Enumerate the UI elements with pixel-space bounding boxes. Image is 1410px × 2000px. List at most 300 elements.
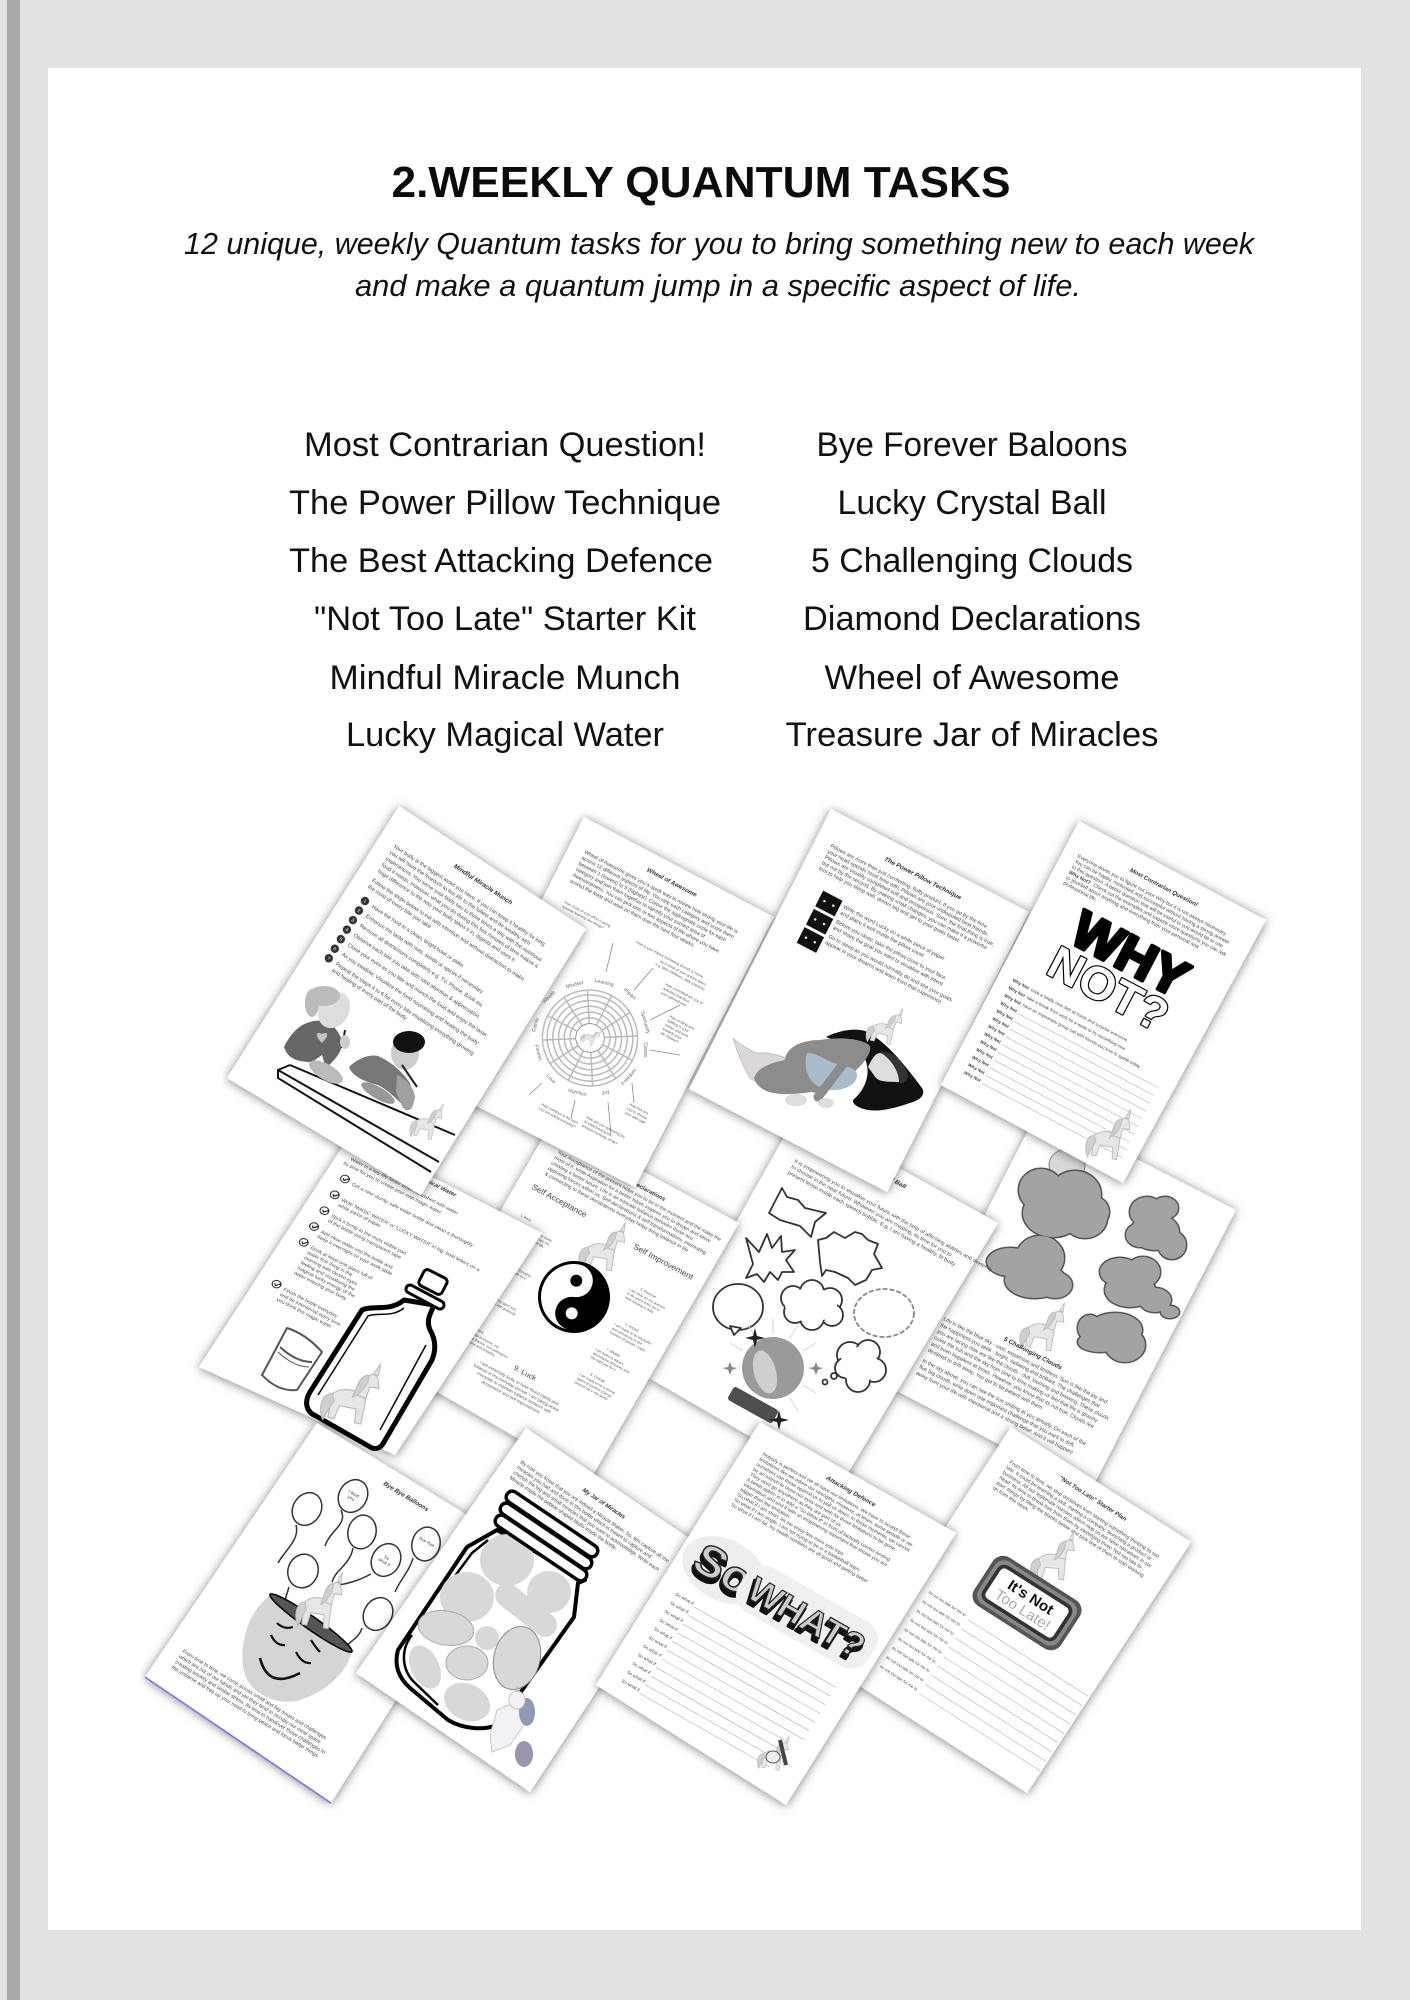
declarations text: I accept my spirit and [485,1292,517,1312]
illustration: jar [396,1489,600,1728]
text block: Check out the examples and explore more questions you can ask [1092,883,1228,958]
text block: most of it, while Aspiration for a better future inspires you to dream and strive [553,1155,712,1244]
numbered steps: 3 [350,917,356,923]
text block: bigger than the limitation. [739,1487,792,1520]
wheel labels: Love [545,1073,557,1085]
heading: My Jar of Miracles [581,1488,627,1521]
wheel labels: Wealth [542,990,557,1005]
icon: unicorn [1084,1103,1133,1163]
text block: Your Acceptance of the present helps you to be in the moment and the make the [556,1150,722,1243]
text block: Nobody is perfect and we all have our limitations. We have to accept these [761,1452,911,1540]
illustration: sleeping woman with pillow [733,1002,923,1111]
declarations text: 4. Others [470,1324,485,1335]
declaration: luck: everyday to maintain balance between self [476,1371,552,1414]
text block: Awesomeness. You can pick one or two aspects of life where you have [571,873,720,955]
declarations text: and feelings with love [495,1261,527,1281]
fill-in list [879,1590,1091,1771]
text block: In the sky above, you can see the sun smiling at you already. On each of the [921,1358,1087,1447]
steps text: appear in your dreams and learn from that experience [824,940,942,1006]
wheel callout leader lines [529,943,680,1135]
wheel callout text: you to choose [626,1107,648,1121]
panel: page 8 Why Not [941,821,1266,1183]
text block: So what if I am single, I am not trying to be in a basketball team [733,1497,861,1573]
text block: head. Its time to break free from them by identifying three 'Not too late to [998,1475,1143,1570]
checklist: and be intentional every time [279,1292,342,1328]
text block: experiences. You serve your body two to three times a day with the nutritious [384,856,543,964]
icon: glass [262,1328,322,1390]
Why Not list: Why Not [1008,985,1026,998]
panel: page 3 Power Pillow [689,809,1029,1192]
Why Not list: Why Not [963,1070,982,1083]
text block: Pillows are visually completed soft and prosperous. Sure, the final thing is true, [823,855,995,948]
text block: five big clouds, write down one important challenge that you want to drift [918,1364,1075,1449]
panel: page 6 Diamond Declarations [406,1122,739,1480]
So what if list: So what if [631,1661,652,1675]
icon: yin yang [533,1256,615,1338]
wheel labels [531,978,651,1098]
task list: left column: The Best Attacking Defence [289,542,713,580]
task list: right column: Treasure Jar of Miracles [786,716,1158,754]
steps text: Before you sleep, take the pillow close to your face [835,919,946,981]
wheel callout text: How is your impact increasing at work or home [636,940,704,979]
So what if list: So what if [648,1635,668,1649]
wheel labels: Mindset [566,980,585,990]
It's Not Too Late sign: It's Not [1004,1577,1057,1618]
heading: Lucky Magical Water [400,1166,458,1199]
text block: cover the sun and the sky from time to time making us feel that life is gloomy [933,1335,1099,1424]
wheel labels: Impact [622,987,638,1002]
task list: left column: "Not Too Late" Starter Kit [314,600,697,638]
So what if list: So what if [664,1609,685,1624]
text block: Pillows are more than just comforting, fluffy product. If you go by the time [829,843,988,930]
steps text: and share the goal you want to visualise with intent [832,925,944,988]
It's Not Too Late sign [968,1551,1086,1655]
heading: Diamond Declarations [607,1167,667,1203]
text block: A better option is to add a "So What if" in front of factually correct limiting [745,1477,891,1563]
declaration: luck: I am extremely lucky to have found clarity and [479,1360,560,1406]
text block: professional life. [1062,881,1098,903]
balloons [278,1474,444,1648]
text block: you are facing now are like the clouds - dull, looming and brewing. These clouds [936,1329,1110,1422]
heading: Attacking Defence [824,1475,877,1509]
text block: Miracle inside the pebble shaped blobs inside the bottle. [508,1475,618,1552]
task list: left column: Most Contrarian Question! [304,426,706,464]
declarations text: 5. Purpose [640,1287,657,1299]
declaration: luck [467,1346,570,1422]
balloon labels: So [383,1554,390,1561]
So what if list: So what if [626,1670,647,1684]
wheel callout text: towards your [662,1027,683,1041]
declarations text: honour it with gratitude [483,1296,517,1317]
So what if list: So what if [642,1644,663,1658]
So what if list [621,1592,839,1774]
text block: between 1 (lowest) to 5 (highest). Colour the appropriate circle for each [577,861,727,944]
wheel labels: Learning [594,978,615,988]
So what if list: So what if [669,1600,690,1615]
Why Not list: have an Impromptu group call with friends you love to speak today [1022,1003,1142,1069]
illustration: open head [242,1566,356,1702]
wheel callout text: How free are [629,1102,649,1116]
declarations text: 6. Impact [625,1322,640,1333]
WHY lettering: WHY [1062,901,1198,1009]
text block: It is empowering you to visualise your future with the help of affirming abilities and dexterity [793,1159,993,1273]
heading: "Not Too Late" Starter Plan [1058,1476,1128,1523]
wheel callout text: towards learning new things? [561,905,605,930]
Why Not list: Why Not [967,1062,986,1075]
checklist: magical lucky energy of the [296,1265,356,1299]
declarations text: around me in the world [574,1380,608,1401]
icon: dark unicorn [756,1731,791,1773]
text block: huge difference to the way your body takes it in, digests and uses it. [376,869,517,964]
task list: left column: Lucky Magical Water [346,716,664,754]
NOT? lettering: NOT? [1040,936,1177,1042]
checklist: water first thing in the [306,1250,354,1278]
declarations text [462,1213,669,1403]
declarations text: humans of people I meet [609,1330,646,1353]
checklist: you drink this magic water [275,1297,333,1330]
text block: food it needs. However, what you do during this few minutes of time makes a [380,862,540,970]
heading: Bye Bye Balloons [382,1480,430,1513]
heading: Most Contrarian Question! [1128,868,1198,909]
fill-in list: Its not too late for me to [885,1655,925,1683]
clouds [987,1169,1186,1362]
So lettering: So [683,1538,761,1609]
panel: page 12 Not Too Late [847,1427,1191,1793]
text block: to choose in the near future. Whatever you are creating, its time for you to [790,1164,953,1258]
panel: page 5 Clouds worksheet (back) [895,1109,1236,1492]
numbered steps: 5 [338,936,344,942]
heading: The Power Pillow Technique [883,856,963,902]
declarations text: 1. Body [520,1213,532,1223]
text block [915,1316,1117,1464]
text block: but not by the second. By making small changes, you can make it a powerful [821,860,988,951]
text block: to yourself about anything and everything from your personal and [1065,875,1200,950]
So what if list: So what if [621,1678,641,1693]
balloon labels: what if [377,1557,392,1568]
Why Not list: Why Not [971,1055,990,1068]
text block: the universe and free up your mind to bring peace and focus better things [170,1665,319,1759]
text block: and even hopeless at times. However, you know that its not true. Clouds are [930,1341,1095,1430]
purple edge [145,1677,331,1803]
Why Not list: Why Not [987,1024,1006,1037]
wheel callout text: your own path [624,1111,646,1125]
declaration: luck: 9. Luck [512,1363,538,1383]
checklist: of the bottle using transparent tape [326,1219,402,1261]
declarations text: and spread joy to the [611,1327,643,1346]
text block: tool to help you sleep well, dream big and get to your goals faster. [818,866,962,945]
numbered steps: Close your eyes as you bite and munch the food and enjoy the taste [346,942,488,1038]
text block: From time to time, we come across small and big issues and challenges [181,1649,328,1741]
text block: Your body is the biggest asset you have. If you can keep it healthy for long [392,844,546,948]
numbered steps: 6 [332,946,338,952]
balloon labels: I liked [347,1489,360,1499]
text block: cherish the big and small miracles that you want to acknowledge. Write each [512,1470,660,1573]
wheel labels: Nutrition [567,1088,587,1098]
declarations text: the right use for it [590,1355,616,1372]
declarations text: I accept everyone, my [467,1329,500,1349]
declarations text: every single day of life. [511,1228,545,1249]
numbered steps: Enhance the taste with nuts, seeds or spices if necessary [364,914,484,996]
panel: page 2 Wheel of Awesome [445,817,774,1187]
text block: opposing forces within us. Self-declarations & self transformations, interesting [547,1166,707,1256]
text block: creating a better future. Life is an intricate balance between these two [550,1161,694,1242]
wheel callout text: life mission? [660,1031,679,1044]
task list: right column: Bye Forever Baloons [816,426,1128,464]
checklist: water entering your body [293,1271,348,1302]
checklist: feeling and visualising the [299,1260,356,1293]
So what if list: So what if [674,1592,695,1606]
heading: Lucky Crystal Ball [854,1157,907,1191]
text block: which are out of our hands and yet they tend to occupy our mind space [177,1654,322,1745]
illustration: man eating [349,1031,425,1110]
fill-in list: Its not too late for me to [921,1599,962,1627]
icon: unicorn [1030,1528,1076,1583]
So what if list: So what if [653,1626,674,1641]
declarations text: work towards it daily [624,1295,655,1314]
balloon labels [345,1489,436,1568]
text block [366,844,552,992]
icon: unicorn [577,1216,628,1275]
wheel callout text: How committed are you to [665,982,704,1005]
task list: right column: Diamond Declarations [803,600,1141,638]
declarations text: 7. Wealth [606,1347,621,1358]
text block: They wont go anywhere as they are part of us. [748,1472,843,1529]
wheel callout text: How much of your effort is going [564,900,611,928]
balloon labels: Bye Bye [418,1535,436,1548]
wheel callout text: How nutritious is the food [541,1102,578,1125]
fill-in list: Its not too late for me to [879,1664,919,1692]
Why Not list [963,977,1172,1158]
steps text: Go to sleep as you would normally do and see your goals [827,934,953,1004]
text block: Wheel of Awesome gives you a quick way to review how strong your life is [583,849,739,935]
Why Not list: Why Not [999,1001,1018,1014]
text block: limitations like we adore our strengths. However, at times, some people or we [758,1457,914,1548]
icon: bottle [307,1268,448,1449]
wheel callout text: fulfilling is your [666,1019,690,1034]
So what if list: So what if [658,1618,679,1632]
panel: page 11 Attacking Defence [596,1422,956,1805]
text block: across 12 different aspects of life. You rate each category and score them [580,855,735,941]
declarations text: I am lucky to attract [594,1348,624,1366]
task list: left column [289,426,721,754]
checklist: morning with closed eyes [302,1255,359,1287]
text block: Its time for you to create your own magic water. [342,1161,443,1216]
fill-in list: Its not too late for me to [915,1608,956,1636]
wheel callout text [538,900,708,1148]
declarations text: I am grateful for my body [515,1220,553,1243]
title: 2.WEEKLY QUANTUM TASKS [392,158,1010,207]
text block: your head spends most time with, Pillows are your undisputed best friends. [826,849,990,938]
wheel labels: Family [531,1016,541,1033]
text block: you will have the freedom to live life to the fullest and be wealthy with [388,850,531,947]
checklist [264,1174,494,1373]
Why Not list: Why Not [975,1047,994,1060]
task list: left column: Mindful Miracle Munch [330,659,680,697]
declarations text: in life and it fuels me to [626,1292,661,1312]
declarations text: I accept all my thoughts [497,1257,532,1279]
declarations text: I am ready to be a strong [578,1373,616,1395]
wheel callout text: How are you optimising joy [586,1115,626,1139]
numbered step icons [797,891,843,953]
Why Not list: Why Not [1003,993,1022,1006]
text block: Why Not? [1068,870,1092,886]
panel: page 9 Balloons [145,1423,500,1803]
icon: unicorn [1018,1296,1067,1355]
illustration: table [278,1065,455,1172]
steps text: and place it well inside the pillow cover [839,911,925,959]
numbered steps [319,895,514,1064]
panel: page 10 Jar of Miracles [356,1428,695,1792]
text block: information and end it with an empowering statement that shows you are [742,1482,889,1568]
fill-in list: Its not too late for me to [903,1627,943,1655]
Why Not list: take a break from work for a week to try something new [1026,995,1127,1052]
panel: page 4 Magical Water [199,1135,542,1455]
declarations text: I am clear on my purpose [628,1288,666,1310]
wheel callout text: career and work [664,1023,689,1039]
declarations text: 8. Change [590,1372,606,1384]
declarations text: family, friends, and colleagues [465,1333,509,1359]
checklist: white piece of paper [337,1203,382,1229]
text block [568,849,740,965]
task list: right column: Lucky Crystal Ball [838,484,1106,522]
numbered steps: 7 [326,956,332,961]
declarations text: abundance of money and [592,1352,630,1374]
text block: the happiness you seek - bright, radiating and brilliant. The challenges that [939,1323,1101,1410]
Why Not list: Why Not [991,1016,1010,1029]
wheel callout text: present moments of life? [581,1124,618,1146]
WHAT? lettering [729,1558,885,1676]
icon: crystal ball [723,1318,823,1430]
text block: ourselves use these against us to pull us down. In those moments, we cannot [755,1462,911,1554]
text block: on from this week. [991,1485,1030,1513]
icon: sun behind cloud [1049,1149,1085,1181]
heading: self acceptance: Self Acceptance [530,1182,589,1219]
text block [1062,853,1237,970]
declaration: luck: balance in my everyday pursuit. I am taking active [473,1363,561,1413]
Why Not list: Why Not [979,1039,998,1052]
text block: destined to drift away. You got to be patient with them. [926,1347,1045,1412]
declarations text: agent of positive change [576,1377,612,1398]
checklist: Get a new sturdy, safe water bottle and clean it thoroughly [350,1182,475,1249]
text block: late. It could be learning a skill, starting a company, launching a product or [1005,1465,1153,1562]
icon: rainbow unicorn [490,1685,535,1767]
fill-in list: Its not too late for me to [897,1636,937,1664]
text block: So what if I am fat, my health numbers are all good and getting better [729,1502,869,1585]
declaration: luck: acceptance and self improvement. [481,1379,542,1415]
heading: 5 Challenging Clouds [1002,1336,1063,1372]
text block: So what if I am short, let me enjoy few more solo trips [736,1492,845,1557]
text block: scored the least and work on them over the next four weeks. [568,878,696,949]
text block: Everyone wants you to figure out your Why but it is not always necessary. [1076,853,1228,938]
declarations text: 2. Mind [500,1252,512,1261]
numbered steps: Observe each bite you take with total attention & appreciation [352,933,480,1020]
declarations text: and the way it serves me [513,1224,550,1247]
panel: page 7 Crystal Ball worksheet [649,1112,998,1488]
numbered steps: Have the food in a clean, bright bowl or plate [370,904,464,969]
checklist: keep it overnight on your work table [316,1235,393,1277]
text block: present tense inside each speech bubble. E.g. I am having a healthy, fit body [787,1170,956,1268]
task list: left column: The Power Pillow Technique [289,484,721,522]
It's Not Too Late sign: Too Late! [991,1586,1053,1634]
speech bubbles [713,1188,914,1392]
text block [729,1452,918,1595]
subtitle: 12 unique, weekly Quantum tasks for you to bring something new to each week [184,226,1255,261]
text block: miracles you had and done in this bottle which is meant to capture and [515,1465,652,1560]
steps text: Write the word Lucky on a white piece of paper [842,904,946,962]
numbered steps: Remove all distractions completely e.g. TV, Phone, Book etc [358,923,484,1009]
wheel labels: Spirituality [639,1011,651,1035]
checklist: Drink at least one glass full of [309,1245,374,1282]
text block: Follow the steps below to eat with intention and without distraction to make [370,878,525,983]
checklist: Finish the bottle everyday [282,1287,339,1319]
numbered steps: 1 [363,898,368,904]
text block: to this question. A better question that will be useful to you would be to use [1070,864,1224,950]
numbered steps: 2 [357,908,362,914]
numbered steps: 4 [344,927,350,933]
Why Not list: Why Not [1012,977,1030,991]
subtitle: and make a quantum jump in a specific aspect of life. [355,268,1081,303]
illustration: woman eating [284,986,356,1088]
Why Not list: cook a totally new dish at home and surprise everyone [1030,987,1129,1043]
text block: category and join them together to identify your current area of [574,867,706,940]
task list: right column: 5 Challenging Clouds [811,542,1133,580]
wheel callout text: How exciting and [669,1014,695,1031]
numbered steps: Repeat the steps 4 to 6 for every bite visualizing everything growing [334,962,475,1057]
wheel callout text: in experiencing the [583,1120,612,1137]
wheel labels: Fitness [533,1044,543,1062]
text block: Water is a key life factor when nourished with water. [349,1157,460,1217]
subtitle [184,226,1255,303]
So lettering [669,1522,779,1618]
fill-in list: Its not too late for me to [891,1645,931,1673]
steps text [824,904,969,1010]
left grey stripe [7,0,20,2000]
wheel labels: Joy [601,1089,611,1097]
text block: creating anxiety and similar stress. Its time to handover those challenges to [174,1659,327,1756]
WHAT? lettering: WHAT? [738,1574,870,1670]
panel: page 1 Mindful Miracle Munch [227,806,586,1195]
checklist: Add clear water into the bottle and [319,1229,394,1271]
numbered steps: and healing of every part of the body [330,968,408,1022]
text block: You can be happy, motivated and successful without having a strong answer [1073,859,1231,946]
declarations text: I am ready to be impactful [613,1323,652,1346]
wheel callout text: you are eating everyday? [538,1107,576,1129]
wheel callout text: your spiritual soul [660,991,687,1008]
text block: From time to time, we stop ourselves from starting something thinking its too [1008,1460,1160,1560]
wheel callout text: as a result of your actions taken [660,959,707,987]
task list: right column: Wheel of Awesome [824,659,1120,697]
declarations text: 3. Soul [488,1287,500,1296]
So lettering: So [685,1533,762,1605]
chart: wheel [526,973,654,1103]
WHAT? lettering: WHAT? [741,1570,873,1666]
icon: unicorn [408,1097,445,1143]
text block: Life is like the blue sky - vast, expansive and limitless. Sun is like the joy and [942,1316,1108,1406]
declarations text: with love and empathy [462,1337,496,1357]
fill-in list: Its not too late for me to [909,1618,950,1646]
text block: By now you know that you are indeed a Miracle Maker. So, lets capture all the [519,1460,670,1564]
checklist: Stick it firmly to the most visible part [330,1214,408,1257]
wheel labels: Career [642,1042,648,1058]
wheel callout text: activities that feed [662,987,690,1004]
Why Not list: Why Not [995,1008,1014,1022]
text block: business. All our legitimate reasons which stop us are false narratives in our [1001,1470,1153,1570]
heading: Mindful Miracle Munch [452,863,513,907]
heading: self improvement: Self Improvement [632,1241,696,1282]
fill-in list: Its not too late for me to [927,1590,968,1618]
text block: be an ostrich to close our eyes and wish for those limitations to be gone. [751,1467,897,1553]
Why Not list: Why Not [983,1031,1002,1045]
